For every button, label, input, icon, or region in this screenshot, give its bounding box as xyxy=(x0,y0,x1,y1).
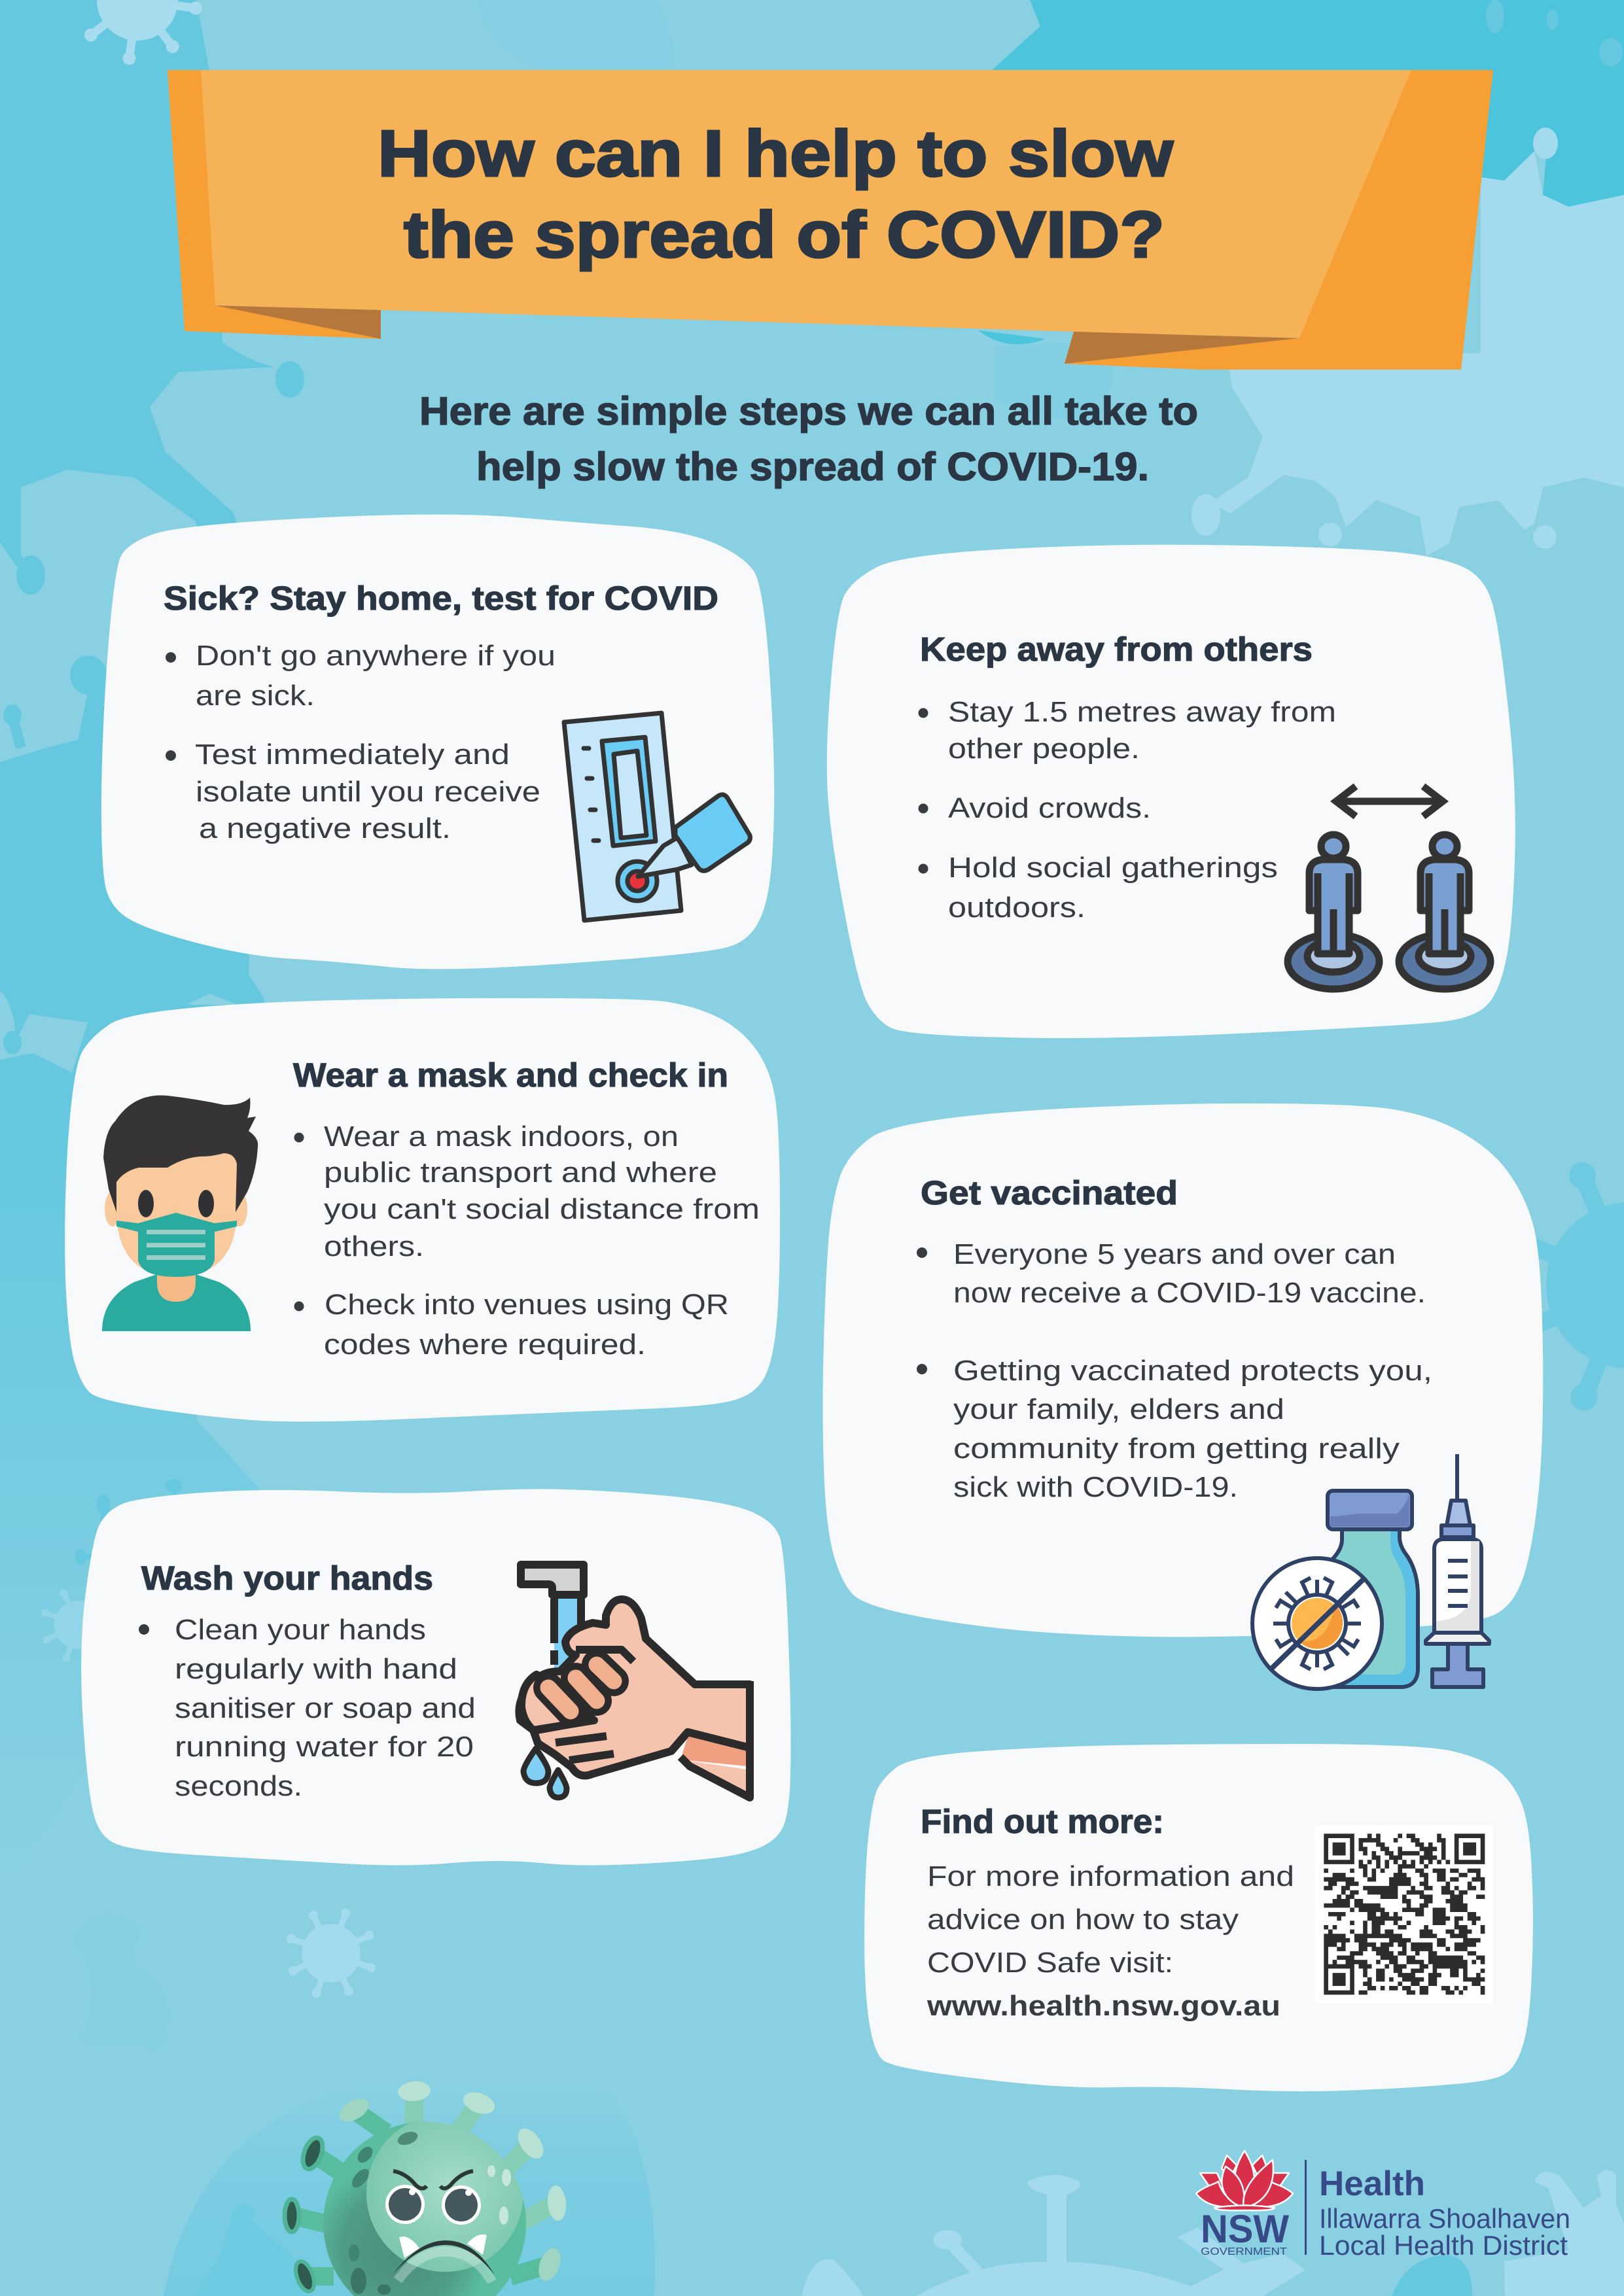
bullet list: codes where required. xyxy=(324,1329,646,1361)
virus spike tips xyxy=(285,2080,567,2294)
icon: distance arrow xyxy=(1336,786,1443,816)
card background xyxy=(101,514,774,969)
banner back fold right xyxy=(1065,70,1493,370)
QR code xyxy=(1315,1825,1493,2003)
bullet list xyxy=(139,1614,476,1802)
bullet list: sick with COVID-19. xyxy=(953,1471,1238,1503)
virus spikes xyxy=(292,2093,557,2276)
bullet list xyxy=(294,1121,760,1361)
bullet list: Hold social gatherings xyxy=(948,852,1278,884)
heading: Sick? Stay home, test for COVID xyxy=(164,580,718,617)
body text: For more information and xyxy=(927,1860,1294,1892)
bullet list: you can't social distance from xyxy=(324,1193,760,1225)
banner front xyxy=(201,70,1411,338)
logo: NSW Health xyxy=(1196,2151,1570,2261)
virus eyebrows xyxy=(393,2171,473,2189)
card background xyxy=(81,1489,791,1866)
bullet list: a negative result. xyxy=(199,812,451,844)
title text: How can I help to slow xyxy=(378,117,1173,190)
card background xyxy=(864,1744,1533,2091)
bullet list: Check into venues using QR xyxy=(325,1289,729,1321)
bullet list: regularly with hand xyxy=(175,1653,457,1685)
bullet list xyxy=(917,1238,1432,1503)
NSW wordmark: NSW xyxy=(1201,2207,1289,2251)
district name: Illawarra Shoalhaven xyxy=(1319,2203,1570,2234)
district name xyxy=(1319,2165,1570,2261)
card background xyxy=(823,1104,1543,1637)
bullet list: now receive a COVID-19 vaccine. xyxy=(953,1277,1426,1309)
bullet list: running water for 20 xyxy=(175,1731,474,1763)
subtitle: Here are simple steps we can all take to xyxy=(419,389,1198,433)
subtitle: help slow the spread of COVID-19. xyxy=(476,445,1149,489)
virus teeth xyxy=(399,2235,487,2258)
virus mouth xyxy=(392,2240,495,2282)
virus highlight xyxy=(366,2115,523,2272)
panel: keep away from others xyxy=(827,545,1515,1038)
bullet list: outdoors. xyxy=(948,892,1086,924)
title banner xyxy=(168,70,1493,370)
bullet list: Getting vaccinated protects you, xyxy=(953,1355,1432,1387)
bullet list: isolate until you receive xyxy=(196,776,540,808)
bullet list: others. xyxy=(324,1230,424,1262)
subtitle xyxy=(419,389,1198,489)
panel: wear a mask xyxy=(65,998,780,1421)
bullet list: Clean your hands xyxy=(175,1614,426,1646)
title text: the spread of COVID? xyxy=(404,198,1165,271)
virus eyes xyxy=(385,2185,481,2225)
bullet list: other people. xyxy=(948,733,1140,765)
divider xyxy=(1305,2160,1307,2255)
icon: syringe xyxy=(1426,1454,1489,1687)
body text: advice on how to stay xyxy=(927,1904,1239,1936)
bullet list: are sick. xyxy=(196,680,315,712)
icon: crossed virus xyxy=(1252,1558,1382,1689)
virus body xyxy=(323,2122,526,2296)
bullet list: Don't go anywhere if you xyxy=(196,640,556,672)
bullet list xyxy=(919,696,1336,924)
heading: Wear a mask and check in xyxy=(293,1056,728,1094)
banner back fold left xyxy=(168,70,381,339)
icon: person left xyxy=(1288,835,1379,989)
panel: get vaccinated xyxy=(823,1104,1543,1689)
district name: Health xyxy=(1319,2165,1425,2203)
bullet list: seconds. xyxy=(175,1770,302,1802)
NSW wordmark: GOVERNMENT xyxy=(1201,2246,1287,2257)
bullet list: Wear a mask indoors, on xyxy=(324,1121,679,1153)
bullet list: Stay 1.5 metres away from xyxy=(948,696,1336,728)
panel: sick, stay home xyxy=(101,514,774,969)
bullet list: sanitiser or soap and xyxy=(175,1692,476,1724)
virus mascot xyxy=(285,2080,567,2296)
panel: wash your hands xyxy=(81,1489,791,1866)
icon: rapid antigen test kit xyxy=(564,713,750,920)
icon: person wearing mask xyxy=(102,1095,258,1331)
card background xyxy=(827,545,1515,1038)
district name: Local Health District xyxy=(1319,2230,1568,2261)
panel: find out more xyxy=(864,1744,1533,2091)
title text xyxy=(378,117,1173,271)
bullet list: public transport and where xyxy=(324,1157,717,1189)
icon: person right xyxy=(1399,835,1491,989)
bullet list: your family, elders and xyxy=(953,1393,1284,1425)
banner fold shadow right xyxy=(1065,332,1299,364)
bullet list: community from getting really xyxy=(953,1433,1400,1465)
virus spots xyxy=(349,2129,511,2295)
bullet list xyxy=(166,640,556,844)
bullet list: Test immediately and xyxy=(195,739,510,771)
body text xyxy=(927,1860,1294,2022)
waratah flower xyxy=(1196,2151,1293,2210)
heading: Get vaccinated xyxy=(921,1174,1178,1211)
bullet list: Everyone 5 years and over can xyxy=(953,1238,1396,1270)
heading: Find out more: xyxy=(921,1803,1164,1840)
body text: www.health.nsw.gov.au xyxy=(927,1990,1280,2022)
icon: vaccine vial xyxy=(1309,1491,1418,1687)
body text: COVID Safe visit: xyxy=(927,1947,1173,1979)
heading: Wash your hands xyxy=(141,1559,433,1597)
bullet list: Avoid crowds. xyxy=(948,792,1151,824)
banner fold shadow left xyxy=(215,305,381,339)
card background xyxy=(65,998,780,1421)
heading: Keep away from others xyxy=(920,631,1313,668)
icon: hands under tap xyxy=(519,1565,750,1798)
